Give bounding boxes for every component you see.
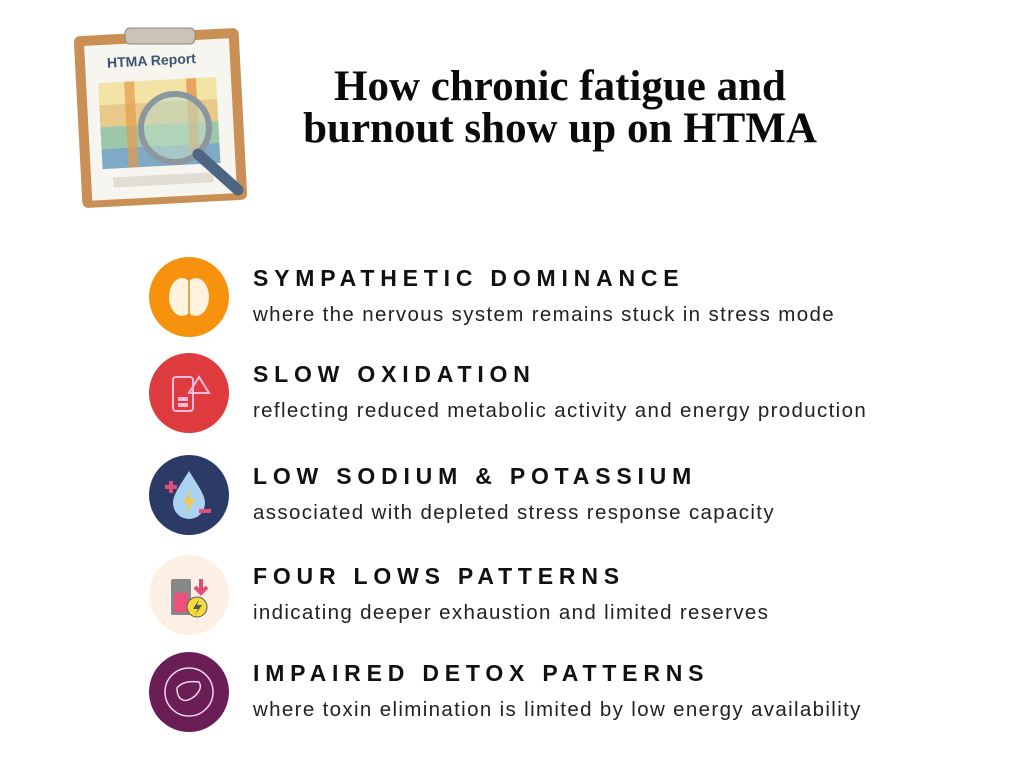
icon: liver cycle: [149, 652, 229, 732]
description: indicating deeper exhaustion and limited reserves: [253, 601, 769, 624]
item: low sodium potassium: [149, 455, 775, 535]
item: impaired detox: [149, 652, 862, 732]
title: How chronic fatigue and: [334, 63, 786, 110]
icon: low battery: [149, 555, 229, 635]
heading: FOUR LOWS PATTERNS: [253, 563, 625, 589]
illustration: clipboard with HTMA report and magnifier: [74, 28, 248, 208]
heading: SYMPATHETIC DOMINANCE: [253, 265, 684, 291]
icon: brain: [149, 257, 229, 337]
heading: IMPAIRED DETOX PATTERNS: [253, 660, 709, 686]
heading: SLOW OXIDATION: [253, 361, 536, 387]
item: slow oxidation: [149, 353, 867, 433]
icon: water drop: [149, 455, 229, 535]
description: reflecting reduced metabolic activity and energy production: [253, 399, 867, 422]
illustration: clipboard with HTMA report and magnifier: HTMA Report: [107, 50, 197, 71]
heading: LOW SODIUM & POTASSIUM: [253, 463, 697, 489]
icon: battery warning: [149, 353, 229, 433]
title: burnout show up on HTMA: [303, 105, 817, 152]
item: sympathetic dominance: [149, 257, 835, 337]
description: where the nervous system remains stuck in stress mode: [253, 303, 835, 326]
title: [303, 63, 817, 152]
description: associated with depleted stress response capacity: [253, 501, 775, 524]
description: where toxin elimination is limited by low energy availability: [253, 698, 862, 721]
item: four lows: [149, 555, 769, 635]
